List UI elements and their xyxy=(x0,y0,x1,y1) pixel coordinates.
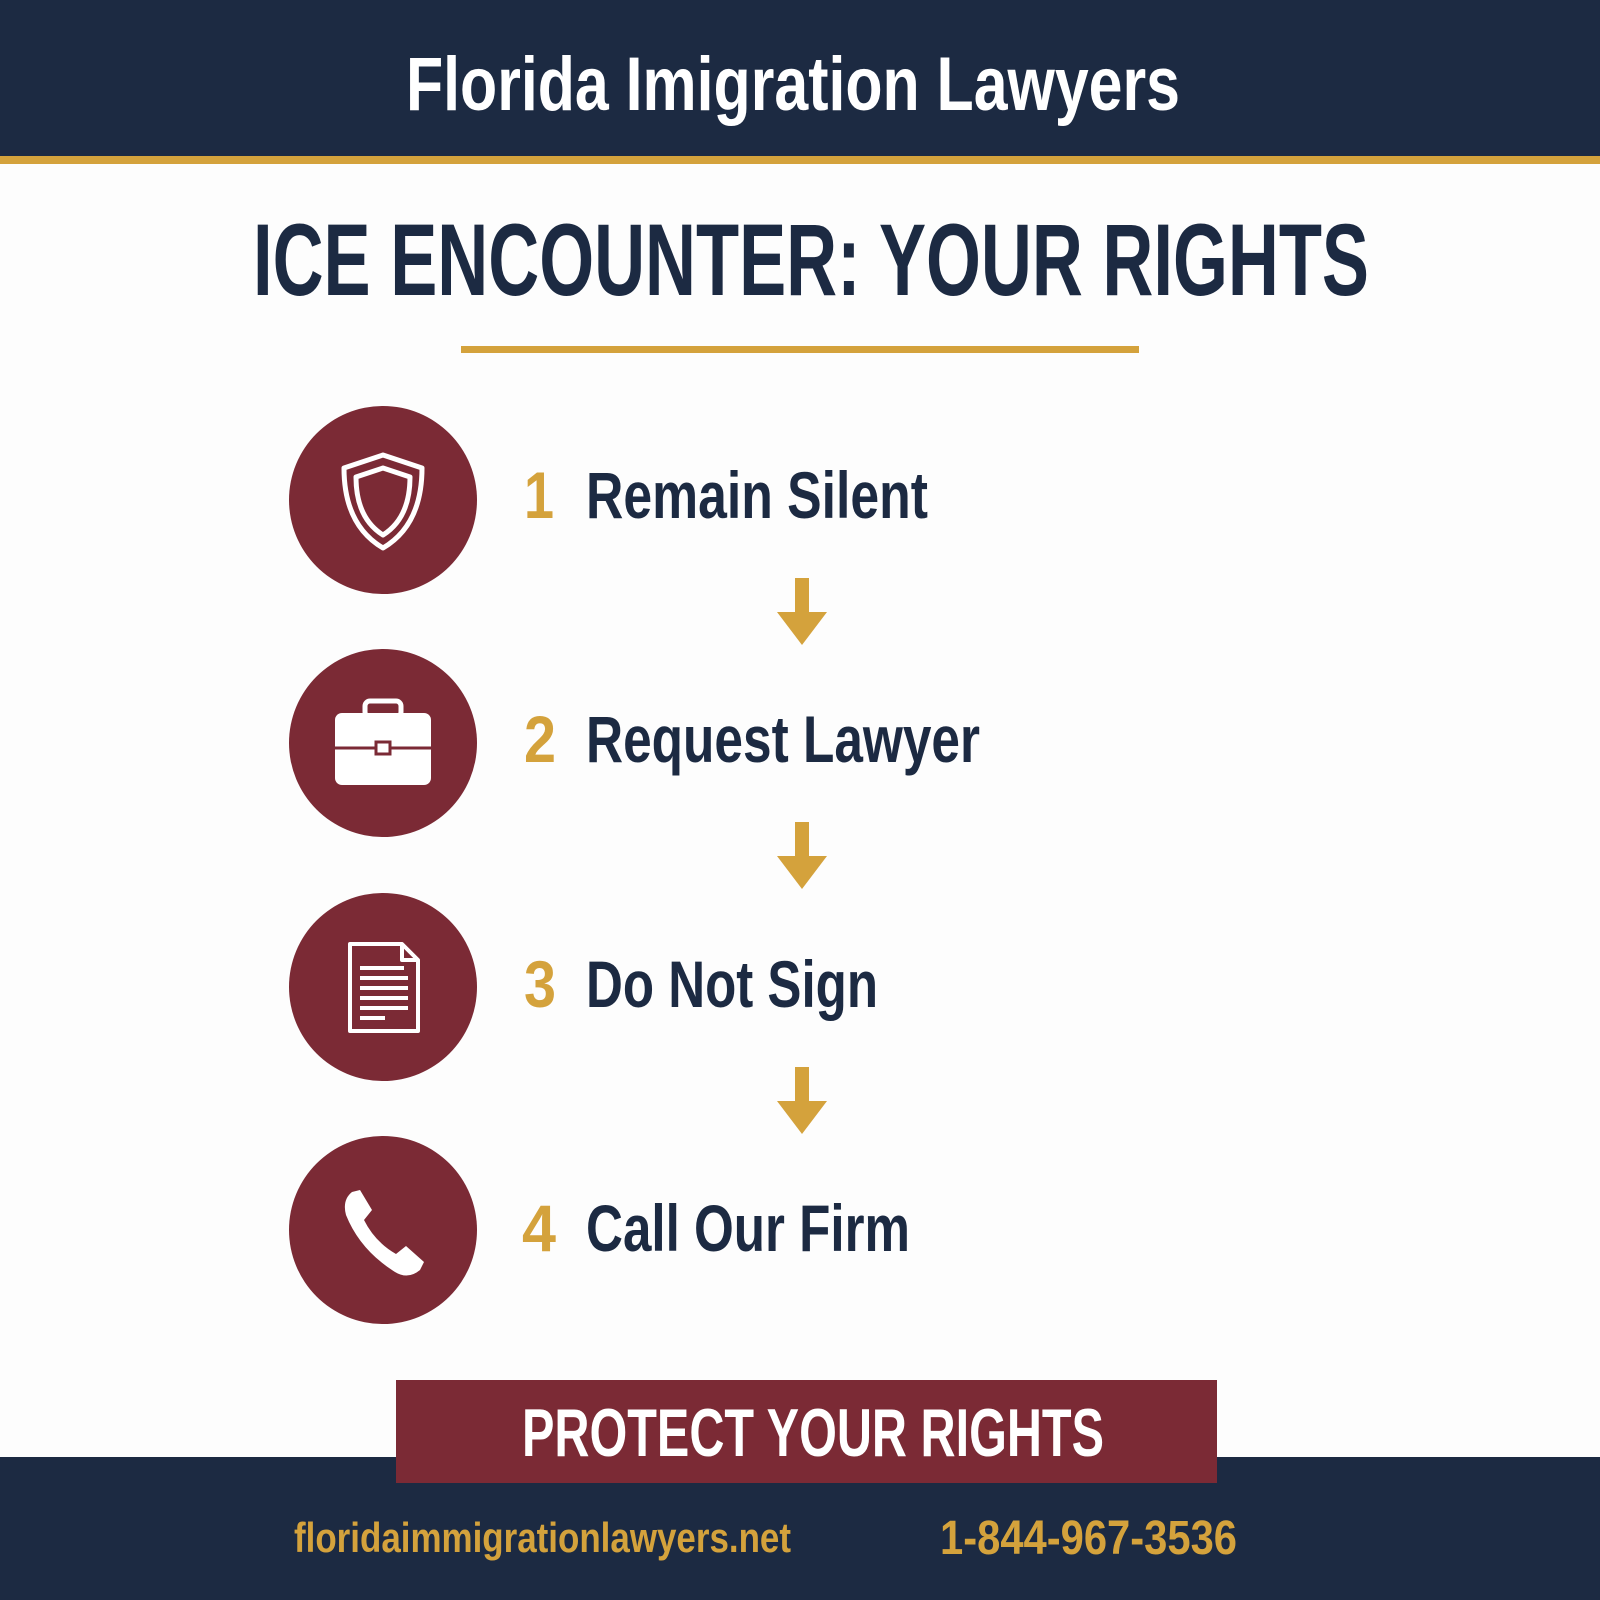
step 1: 1 xyxy=(524,458,554,532)
step 2: 2 xyxy=(524,702,556,776)
icon: briefcase xyxy=(335,701,431,785)
step 3 xyxy=(289,893,878,1081)
step 4 xyxy=(289,1136,910,1324)
step 3: 3 xyxy=(524,947,556,1021)
icon: document xyxy=(350,944,418,1031)
arrow 3 xyxy=(777,1067,827,1134)
step 2 xyxy=(289,649,980,837)
footer url: floridaimmigrationlawyers.net xyxy=(294,1514,791,1561)
step 4: 4 xyxy=(522,1191,556,1265)
step 4: Call Our Firm xyxy=(586,1191,910,1265)
icon: shield xyxy=(344,455,422,548)
icon: phone xyxy=(345,1190,424,1276)
footer bar xyxy=(0,1457,1600,1600)
step 1 xyxy=(289,406,928,594)
callout banner xyxy=(396,1380,1217,1483)
arrow 2 xyxy=(777,822,827,889)
footer phone: 1-844-967-3536 xyxy=(940,1512,1237,1565)
step 2: Request Lawyer xyxy=(586,702,980,776)
callout banner: PROTECT YOUR RIGHTS xyxy=(522,1395,1104,1471)
header title: Florida Imigration Lawyers xyxy=(406,42,1180,127)
header bar xyxy=(0,0,1600,164)
step 1: Remain Silent xyxy=(586,458,928,532)
arrow 1 xyxy=(777,578,827,645)
title underline xyxy=(461,346,1139,353)
step 3: Do Not Sign xyxy=(586,947,878,1021)
